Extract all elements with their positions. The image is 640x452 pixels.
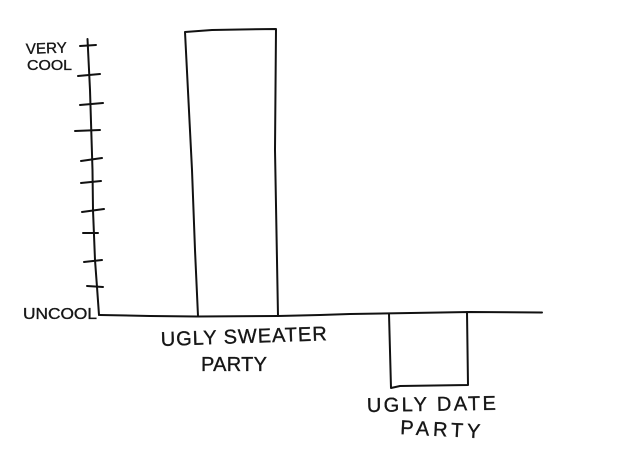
label: ugly sweater party: PARTY [201, 354, 267, 376]
horizontal baseline [100, 312, 542, 316]
vertical axis [75, 39, 104, 315]
axis label: very cool: COOL [27, 57, 72, 74]
label: ugly date party [367, 393, 496, 443]
axis label: very cool: VERY [26, 40, 67, 58]
chart: coolness of parties [23, 29, 542, 443]
label: ugly date party: PARTY [400, 417, 481, 443]
label: ugly sweater party [160, 323, 327, 376]
label: ugly sweater party: UGLY SWEATER [160, 323, 327, 351]
bar: ugly date party [389, 312, 468, 388]
label: ugly date party: UGLY DATE [367, 393, 496, 417]
axis label: uncool: UNCOOL [23, 306, 97, 323]
axis label: very cool [26, 40, 72, 74]
bar: ugly sweater party [185, 29, 278, 316]
